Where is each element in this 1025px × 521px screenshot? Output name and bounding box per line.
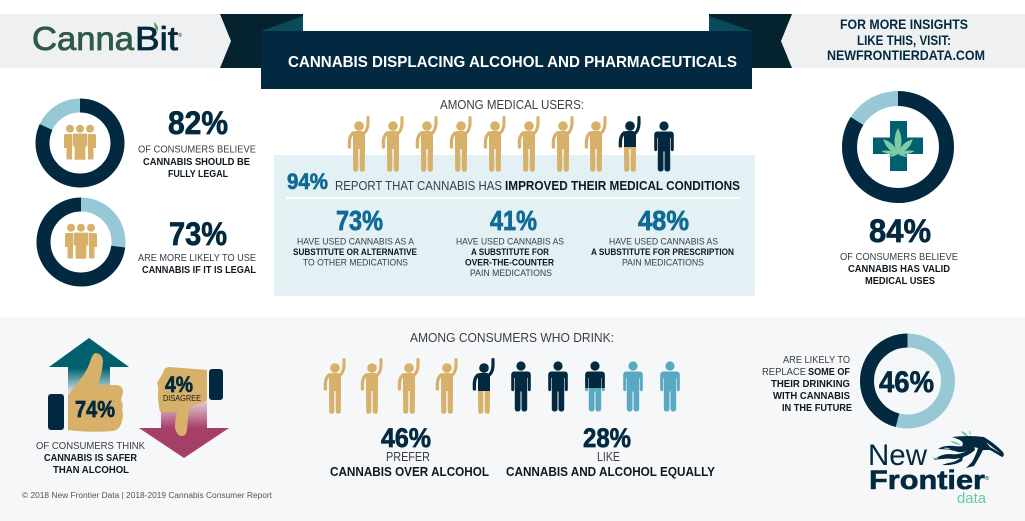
stat: 28% like equally: 28% — [583, 423, 631, 453]
stat: 48% prescription: A SUBSTITUTE FOR PRESCRIPTION — [591, 247, 734, 258]
logo: New Frontier Data: ® — [985, 475, 989, 482]
text: 73%: CANNABIS IF IT IS LEGAL — [142, 265, 256, 276]
stat: 48% prescription — [591, 205, 734, 269]
text: 84% — [840, 213, 958, 287]
stat: 73% substitute — [293, 205, 417, 269]
stat: 73% substitute: HAVE USED CANNABIS AS A — [297, 236, 415, 248]
heading: among consumers who drink: AMONG CONSUMERS WHO DRINK: — [410, 331, 614, 345]
stat: 41% over the counter: OVER-THE-COUNTER — [465, 258, 554, 269]
pictogram: drinkers — [325, 360, 680, 414]
text: 74% caption: CANNABIS IS SAFER — [44, 453, 138, 464]
stat: 48% prescription: 48% — [638, 205, 689, 236]
stat: 48% prescription: PAIN MEDICATIONS — [622, 258, 704, 269]
donut chart: 82% — [42, 106, 118, 180]
stat: 28% like equally: LIKE — [597, 450, 620, 464]
text: 82%: 82% — [168, 105, 228, 141]
text: more insights link: NEWFRONTIERDATA.COM — [827, 47, 985, 63]
text: replace drinking: WITH CANNABIS — [773, 391, 850, 402]
text: more insights link — [827, 16, 985, 63]
icon: thumbs down: 4% — [165, 372, 193, 397]
text: 84%: MEDICAL USES — [865, 276, 935, 287]
stat: 73% substitute: TO OTHER MEDICATIONS — [303, 258, 408, 269]
stat: 73% substitute: SUBSTITUTE OR ALTERNATIVE — [293, 247, 417, 258]
icon: medical cross with cannabis leaf — [873, 121, 923, 171]
arrow: down — [139, 402, 229, 458]
text: 73%: ARE MORE LIKELY TO USE — [138, 253, 256, 264]
text: 73% — [138, 216, 256, 276]
panel: lower section background — [0, 317, 1025, 521]
text: 74% caption — [36, 441, 145, 476]
text: 84%: CANNABIS HAS VALID — [848, 264, 950, 275]
icon: thumbs up: 74% — [75, 396, 115, 422]
heading: among medical users: AMONG MEDICAL USERS: — [440, 98, 584, 112]
pictogram: medical users — [349, 118, 674, 172]
logo: CannaBit: Canna — [32, 20, 135, 57]
text: 84%: OF CONSUMERS BELIEVE — [840, 252, 958, 263]
logo: New Frontier Data: data — [957, 490, 987, 507]
footer credit: © 2018 New Frontier Data | 2018-2019 Cannabis Consumer Report — [22, 491, 273, 500]
stat: 41% over the counter: HAVE USED CANNABIS AS — [456, 236, 564, 248]
stat: 46% prefer — [330, 423, 489, 479]
logo: New Frontier Data: Frontier — [869, 465, 986, 495]
text: more insights link: LIKE THIS, VISIT: — [857, 32, 951, 48]
text: 84%: 84% — [869, 213, 931, 249]
stat: 82% fully legal — [42, 105, 256, 180]
stat: 84% valid medical uses — [840, 98, 958, 287]
stat: 48% prescription: HAVE USED CANNABIS AS — [609, 236, 718, 248]
text: 82%: CANNABIS SHOULD BE — [143, 157, 250, 168]
stat: 94% improved: IMPROVED THEIR MEDICAL CONDITIONS — [505, 179, 740, 193]
stat: 46% prefer: PREFER — [386, 450, 430, 464]
icon: thumbs up — [48, 353, 123, 432]
stat: 94% improved — [287, 169, 740, 194]
header band: CannaBit logo — [0, 14, 231, 68]
stat: 46% replace drinking — [762, 340, 948, 422]
icon: horse — [932, 430, 1004, 468]
text: 82%: FULLY LEGAL — [168, 169, 228, 180]
stat: 46% prefer: 46% — [381, 423, 431, 453]
icon: thumbs down: DISAGREE — [163, 393, 201, 403]
text: 73%: 73% — [169, 216, 227, 252]
text: 82%: OF CONSUMERS BELIEVE — [138, 144, 256, 156]
text: replace drinking: THEIR DRINKING — [771, 379, 850, 390]
stat: 28% like equally — [506, 423, 716, 479]
title: CANNABIS DISPLACING ALCOHOL AND PHARMACEUTICALS — [288, 54, 737, 71]
donut chart: 84% — [850, 98, 946, 196]
stat: 41% over the counter: A SUBSTITUTE FOR — [471, 247, 549, 258]
stat: 41% over the counter — [456, 205, 564, 279]
text: 74% caption: OF CONSUMERS THINK — [36, 441, 145, 452]
logo: CannaBit: ® — [178, 32, 182, 39]
stat: 28% like equally: CANNABIS AND ALCOHOL EQUALLY — [506, 465, 716, 479]
logo: CannaBit: Bit — [135, 20, 178, 57]
donut chart: 73% — [44, 204, 118, 280]
logo: New Frontier Data: New — [868, 439, 927, 472]
panel: consumers who drink — [325, 331, 716, 479]
stat: 94% improved: REPORT THAT CANNABIS HAS — [335, 179, 502, 193]
logo: CannaBit — [32, 20, 182, 57]
text: 82% — [138, 105, 256, 180]
stat: 41% over the counter: 41% — [490, 205, 537, 236]
icon: thumbs down — [157, 367, 223, 436]
text: replace drinking — [762, 355, 852, 414]
panel: medical users — [274, 98, 755, 296]
donut chart: 46%: 46% — [879, 366, 934, 399]
header band: more insights — [781, 14, 1025, 68]
text: replace drinking: ARE LIKELY TO — [783, 355, 850, 366]
stat: 94% improved: 94% — [287, 169, 328, 194]
donut chart: 46% — [867, 340, 948, 422]
logo: New Frontier Data — [868, 430, 1004, 507]
text: 74% caption: THAN ALCOHOL — [53, 465, 129, 476]
stat: 73% substitute: 73% — [336, 205, 383, 236]
text: more insights link: FOR MORE INSIGHTS — [840, 16, 968, 32]
text: replace drinking: IN THE FUTURE — [782, 403, 852, 414]
stat: safer than alcohol — [36, 338, 229, 476]
title ribbon — [220, 14, 792, 89]
text: replace drinking: REPLACE — [762, 367, 806, 378]
arrow: up — [49, 338, 129, 397]
stat: 73% if legal — [44, 204, 256, 280]
text: replace drinking: SOME OF — [808, 367, 850, 378]
stat: 41% over the counter: PAIN MEDICATIONS — [470, 268, 552, 279]
stat: 46% prefer: CANNABIS OVER ALCOHOL — [330, 465, 489, 479]
